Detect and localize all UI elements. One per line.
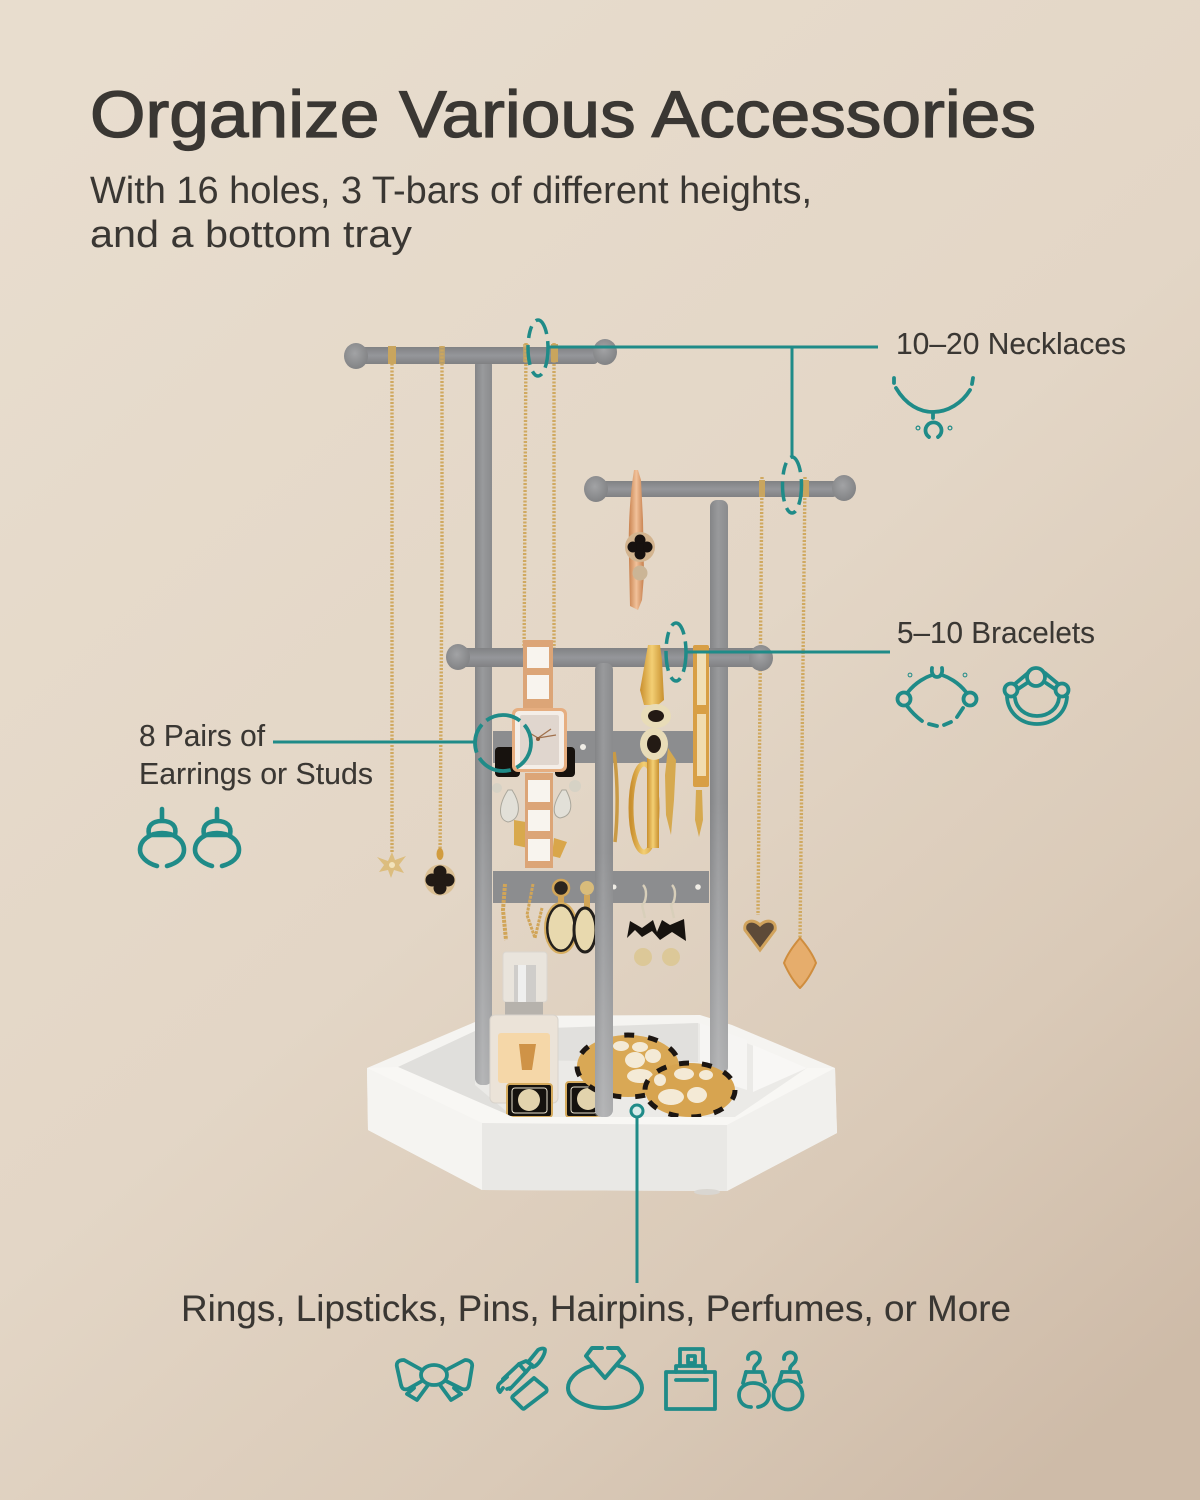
icon: studs bbox=[140, 809, 239, 866]
tray front bbox=[367, 1067, 837, 1195]
earrings label bbox=[139, 718, 373, 791]
callout: necklaces bbox=[528, 320, 1126, 513]
left post bbox=[475, 358, 492, 1085]
callout: earrings bbox=[139, 715, 531, 866]
icon: hook earrings bbox=[739, 1352, 802, 1410]
tray leader line bbox=[631, 1105, 643, 1283]
icon: bow bbox=[397, 1360, 472, 1400]
earring plate lower bbox=[493, 871, 709, 903]
perfume bottle bbox=[490, 952, 558, 1103]
icon: bracelet closed bbox=[1004, 668, 1068, 724]
necklace leader lines bbox=[528, 320, 878, 513]
earring plate upper bbox=[493, 731, 693, 763]
jewelry stand product bbox=[344, 339, 856, 1195]
necklaces label: 10–20 Necklaces bbox=[896, 326, 1126, 361]
earring leader lines bbox=[273, 715, 531, 771]
subtitle: With 16 holes, 3 T-bars of different heights, bbox=[90, 170, 812, 212]
necklaces bbox=[388, 343, 809, 940]
pendant clover bbox=[424, 848, 456, 896]
pearl brooch back bbox=[577, 1035, 679, 1097]
gold bangle with jewels bbox=[640, 645, 671, 848]
middle T-bar bbox=[584, 475, 856, 502]
callout: bracelets bbox=[666, 615, 1095, 726]
subtitle: and a bottom tray bbox=[90, 214, 412, 256]
pendant diamond bbox=[784, 938, 816, 988]
square studs bbox=[507, 1082, 600, 1117]
title: Organize Various Accessories bbox=[90, 77, 1036, 151]
icon: bracelet open bbox=[898, 668, 976, 726]
bracelet leader lines bbox=[666, 623, 890, 681]
gold leaf earring bbox=[665, 748, 676, 835]
rose gold bangle with clover bbox=[625, 470, 655, 610]
tray back bbox=[367, 1015, 837, 1191]
pendant heart bbox=[745, 921, 775, 950]
earrings label: 8 Pairs of bbox=[139, 718, 265, 753]
bottom earrings bbox=[503, 880, 686, 966]
earrings label: Earrings or Studs bbox=[139, 756, 373, 791]
pendant star bbox=[377, 852, 406, 878]
bracelets label: 5–10 Bracelets bbox=[897, 615, 1095, 650]
subtitle bbox=[90, 170, 812, 256]
icon: lipstick bbox=[498, 1348, 547, 1409]
callout: tray accessories bbox=[181, 1105, 1011, 1410]
wristwatch with stud earrings bbox=[492, 640, 581, 868]
right post bbox=[710, 500, 728, 1074]
plate holes bbox=[580, 744, 701, 890]
center post bbox=[595, 663, 613, 1117]
third T-bar bbox=[446, 644, 773, 671]
icon: necklace bbox=[894, 378, 973, 437]
gold bangle right bbox=[693, 645, 709, 837]
icon: perfume box bbox=[666, 1349, 715, 1409]
icon: ring bbox=[568, 1348, 642, 1408]
small hoop behind post bbox=[614, 752, 617, 842]
gold hoop earring bbox=[631, 764, 657, 852]
pearl brooch front bbox=[645, 1063, 735, 1117]
tray label: Rings, Lipsticks, Pins, Hairpins, Perfumes, or More bbox=[181, 1288, 1011, 1329]
top T-bar bbox=[344, 339, 617, 369]
